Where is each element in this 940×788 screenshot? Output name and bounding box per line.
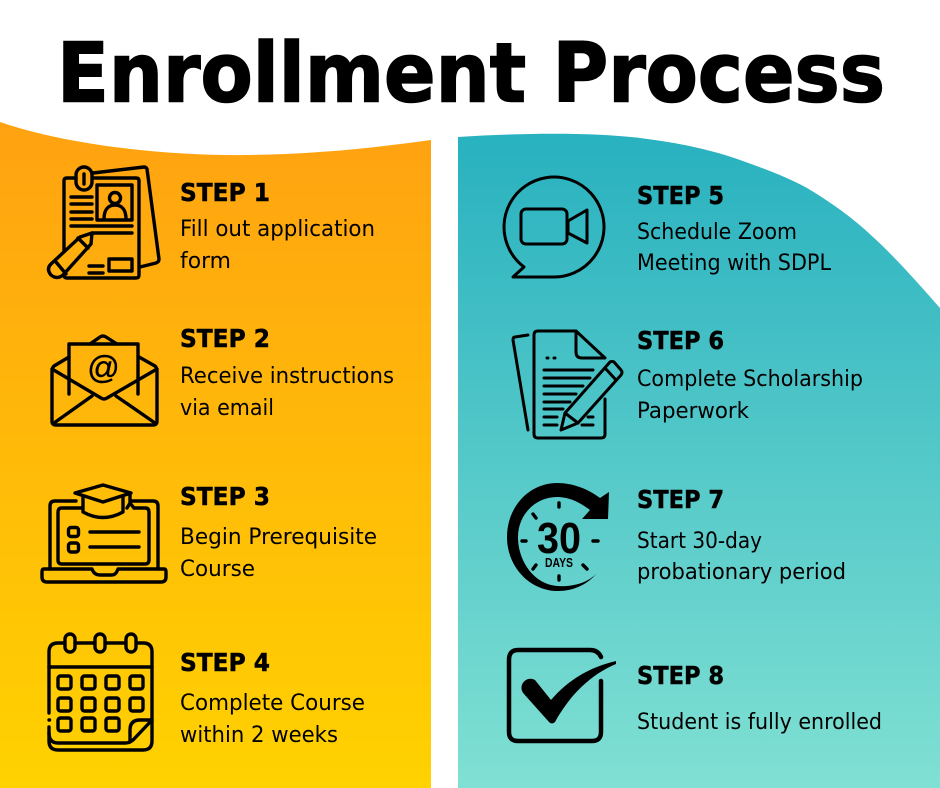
title: Enrollment Process [57, 26, 885, 122]
heading: step 7: STEP 7 [637, 485, 724, 514]
panel: orange background [0, 122, 431, 788]
text: step 3 description: Begin Prerequisite [180, 524, 377, 550]
text: step 1 description: form [180, 248, 231, 274]
icon: calendar [49, 634, 152, 750]
heading: step 4: STEP 4 [180, 648, 270, 677]
text: step 1 description [180, 216, 375, 274]
text: step 4 description: within 2 weeks [180, 722, 338, 748]
text: step 7 description: probationary period [637, 559, 846, 585]
icon: 30 days timer: DAYS [545, 555, 573, 570]
text: step 4 description [180, 690, 365, 748]
text: step 5 description: Schedule Zoom [637, 219, 797, 245]
text: step 2 description: via email [180, 395, 274, 421]
heading: step 2: STEP 2 [180, 324, 270, 353]
icon: paperwork with pencil [513, 331, 622, 438]
text: step 2 description: Receive instructions [180, 363, 394, 389]
text: step 1 description: Fill out application [180, 216, 375, 242]
heading: step 3: STEP 3 [180, 482, 270, 511]
heading: step 6: STEP 6 [637, 326, 724, 355]
icon: application form [48, 167, 159, 278]
text: step 2 description [180, 363, 394, 421]
icon: email envelope: @ [87, 350, 120, 386]
heading: step 8: STEP 8 [637, 661, 724, 690]
text: step 4 description: Complete Course [180, 690, 365, 716]
icon: email envelope [52, 336, 157, 425]
text: step 6 description: Complete Scholarship [637, 366, 863, 392]
text: step 7 description [637, 528, 846, 585]
heading: step 1: STEP 1 [180, 178, 270, 207]
icon: laptop with graduation cap [42, 485, 166, 582]
text: step 5 description [637, 219, 831, 276]
text: step 3 description: Course [180, 556, 255, 582]
text: step 7 description: Start 30-day [637, 528, 762, 554]
text: step 5 description: Meeting with SDPL [637, 250, 831, 276]
icon: checkbox [509, 650, 616, 741]
panel: teal background [458, 134, 940, 788]
icon: 30 days timer: 30 [537, 514, 581, 563]
text: step 8 description: Student is fully enrolled [637, 709, 882, 735]
text: step 6 description: Paperwork [637, 398, 749, 424]
icon: zoom video chat bubble [504, 177, 604, 277]
heading: step 5: STEP 5 [637, 181, 724, 210]
text: step 6 description [637, 366, 863, 424]
icon: 30 days timer [507, 483, 609, 591]
text: step 3 description [180, 524, 377, 582]
